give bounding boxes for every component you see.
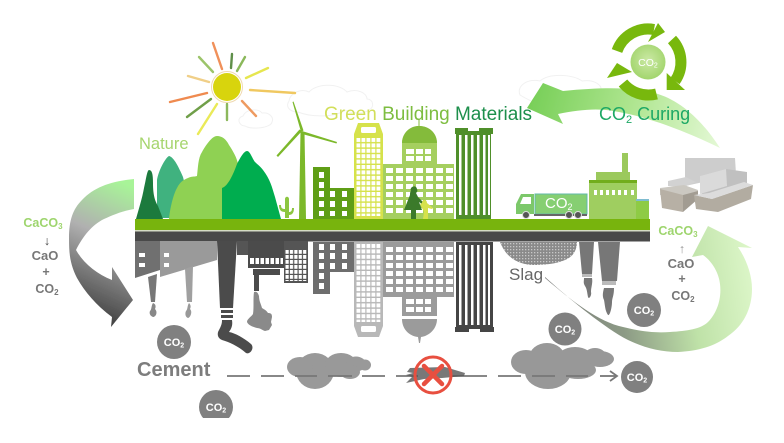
emission clouds right [511, 343, 614, 389]
icon: red cross over blocked line [406, 357, 465, 393]
CO2 bubble: CO [555, 324, 571, 336]
arrow: CaCO3 to cement curved [69, 179, 134, 327]
mirrored grey building: columns [455, 242, 494, 332]
text: right equation CaO and CO2 to CaCO3: ↑ [679, 242, 685, 256]
text: left equation CaCO3 to CaO and CO2: 3 [58, 222, 63, 231]
icon: CO2 recycling symbol [607, 23, 685, 95]
text: left equation CaCO3 to CaO and CO2: ↓ [44, 234, 50, 248]
CO2 bubble: 2 [643, 378, 647, 384]
faint background clouds [239, 75, 603, 128]
text: left equation CaCO3 to CaO and CO2: CaCO [23, 216, 58, 230]
text: right equation CaO and CO2 to CaCO3: 3 [693, 230, 698, 239]
CO2 bubble: CO [627, 372, 643, 384]
text: Cement: Cement [137, 359, 211, 381]
text: left equation CaCO3 to CaO and CO2: 2 [54, 288, 59, 297]
icon: concrete blocks [660, 158, 753, 212]
CO2 bubble: CO [206, 402, 222, 414]
icon: truck: CO [545, 195, 568, 212]
text: right equation CaO and CO2 to CaCO3: CO [671, 289, 690, 303]
slag heap [500, 242, 577, 265]
icon: truck [516, 194, 587, 218]
mirrored grey industry: tall chimney with smoke [217, 241, 252, 353]
CO2 bubble [548, 312, 582, 346]
mirrored grey building: tower [354, 242, 383, 337]
CO2 bubble [627, 293, 661, 327]
icon: cactus [279, 197, 294, 218]
CO2 bubble [621, 361, 653, 393]
building: factory [589, 153, 649, 219]
CO2 bubble: CO [634, 305, 650, 317]
icon: CO2 recycling symbol: 2 [654, 62, 658, 70]
building: dark green block [313, 167, 354, 219]
building: light green office with dome [383, 120, 454, 219]
dashed emission line with arrow [227, 371, 617, 381]
text: left equation CaCO3 to CaO and CO2: CO [35, 282, 54, 296]
ground strip: green and dark [135, 219, 650, 242]
text: CO2 curing: Curing [632, 104, 690, 124]
arrow: CO2 curing to green building materials [527, 83, 720, 148]
mirrored grey building: grid block [284, 241, 308, 283]
text: Nature: Nature [139, 135, 189, 153]
CO2 bubble [157, 325, 191, 359]
building: yellow tower [354, 123, 383, 219]
CO2 bubble: 2 [180, 342, 184, 350]
CO2 bubble: CO [164, 337, 180, 349]
text: green building materials heading: Green Building Materials [324, 104, 532, 125]
text: right equation CaO and CO2 to CaCO3: CaCO [658, 224, 693, 238]
text: left equation CaCO3 to CaO and CO2 [23, 216, 63, 297]
CO2 bubble: 2 [222, 408, 226, 414]
icon: CO2 recycling symbol: CO [638, 57, 654, 69]
mirrored grey building: stepped block [313, 242, 354, 294]
icon: truck: 2 [568, 202, 573, 212]
text: left equation CaCO3 to CaO and CO2: CaO [32, 248, 58, 263]
emission clouds left [287, 353, 371, 389]
text: right equation CaO and CO2 to CaCO3: CaO [668, 256, 694, 271]
text: left equation CaCO3 to CaO and CO2: + [42, 265, 50, 279]
building: dark green columns [455, 128, 493, 219]
text: CO2 curing: CO [599, 104, 626, 124]
CO2 bubble: 2 [650, 310, 654, 318]
text: right equation CaO and CO2 to CaCO3 [658, 224, 698, 304]
icon: parent and child figures [404, 186, 433, 219]
mirrored grey industry: left factories [135, 241, 217, 318]
arrow: slag to CaCO3 curved [545, 226, 752, 352]
text: right equation CaO and CO2 to CaCO3: 2 [690, 295, 695, 304]
mirrored grey industry: dark plant and smoke [237, 241, 284, 331]
mirrored chimneys: right [579, 242, 620, 315]
mountains [136, 136, 281, 219]
CO2 bubble [199, 390, 233, 424]
text: Slag: Slag [509, 265, 543, 284]
icon: wind turbine [276, 102, 337, 219]
mirrored grey building: office with dome [383, 242, 454, 343]
text: right equation CaO and CO2 to CaCO3: + [678, 272, 686, 286]
CO2 bubble: 2 [571, 330, 575, 336]
text: CO2 curing: 2 [626, 114, 632, 126]
icon: sun [170, 43, 295, 134]
